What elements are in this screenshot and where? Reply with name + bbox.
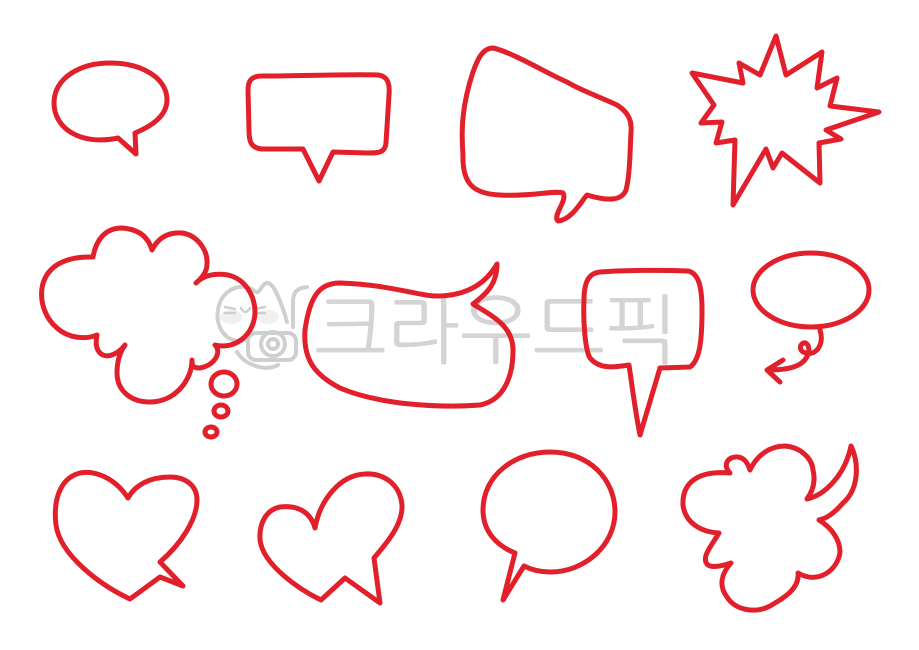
watermark: cat with camera logo [217,283,307,368]
bubble: starburst [692,36,879,205]
bubble: round [483,452,615,600]
bubble: thought cloud [42,228,255,437]
bubble: rectangle [248,75,389,181]
bubble: small oval [54,63,167,154]
thought dots [205,372,237,437]
bubble: oval with curly arrow [753,253,869,382]
bubble: square with long tail [584,270,702,435]
watermark: wordmark: 크라우드픽 [314,289,678,374]
bubble: heart [55,472,197,599]
bubble: tilted heart [260,474,402,603]
bubble: wide rounded with swoosh tail [305,264,513,406]
bubble: cloud with swoosh tail [683,446,856,610]
bubble: large slanted box [462,48,631,221]
curly arrow [767,330,821,382]
